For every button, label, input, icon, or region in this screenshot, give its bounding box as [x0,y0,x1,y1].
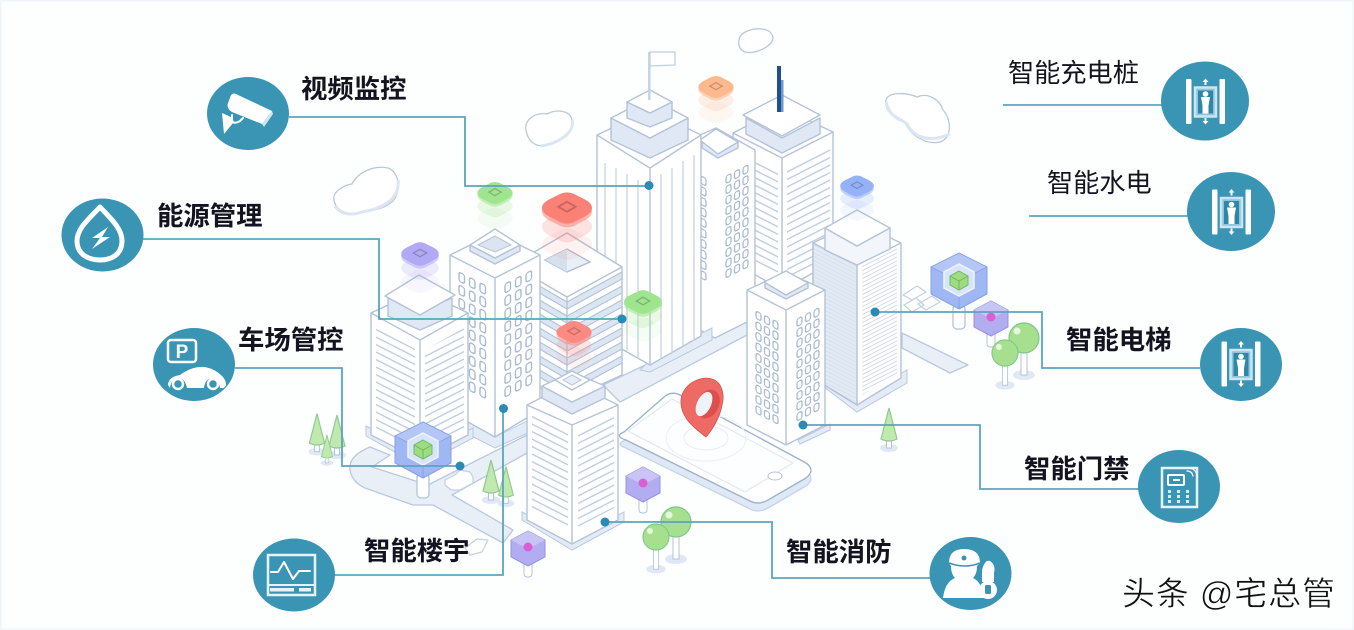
connector: 智能楼宇 [335,404,508,575]
building: central tower with flag [597,52,712,372]
cloud: top [739,29,773,53]
building: left hatched [366,275,473,466]
label: 视频监控: 视频监控 [301,74,407,104]
floating chip: blue [840,176,874,221]
sensor node: center [626,467,660,513]
smartphone with location pin [619,378,811,511]
watermark: 头条 @宅总管 [1122,575,1335,612]
icon: parking and car [153,328,235,401]
connector: 智能水电 [1029,215,1188,217]
small cars and parked vehicles [445,286,940,555]
icon: access keypad [1138,450,1220,523]
floating chip: purple [401,242,439,293]
building: left windowed [448,229,545,448]
icon: elevator [1200,328,1282,401]
label: 智能楼宇: 智能楼宇 [364,536,470,566]
floating chip: green upper [477,182,513,230]
floating chip: orange [698,76,734,124]
cloud: left [334,167,398,214]
connector: 智能充电桩 [1003,104,1162,106]
building: rear center windowed [700,128,755,338]
connector: 智能门禁 [798,420,1139,489]
label: 智能充电桩: 智能充电桩 [1008,58,1139,88]
icon: elevator (water power) [1187,172,1275,251]
cloud: right [886,94,950,143]
sensor cube: left [395,422,451,498]
floating chip: green lower [624,290,662,341]
cloud: upper center [526,111,572,146]
building: stacked floors [512,233,622,400]
connector: 能源管理 [143,239,626,324]
building: front center hatched [522,371,624,550]
road network [350,317,968,543]
icon: firefighter [930,537,1012,610]
icon: water drop energy [62,198,144,272]
floating chip: red lower [556,321,592,369]
icon: security camera [207,77,289,150]
floating chip: red large [542,192,592,260]
icon: monitor [253,538,335,612]
building: front right windowed [747,271,830,445]
icon: parking and car: P [176,342,189,363]
icon: elevator (charging) [1161,62,1249,140]
label: 能源管理: 能源管理 [157,201,263,231]
label: 智能水电: 智能水电 [1047,168,1152,198]
sensor node: bottom [511,531,545,577]
sensor node: right [974,301,1008,347]
connector: 视频监控 [289,117,654,190]
label: 智能门禁: 智能门禁 [1024,454,1130,484]
connector: 智能电梯 [870,308,1200,368]
connector: 车场管控 [235,368,464,470]
label: 智能消防: 智能消防 [786,537,892,567]
sensor cube: right [931,253,987,329]
label: 车场管控: 车场管控 [238,325,344,355]
connector: 智能消防 [600,518,930,578]
trees [308,323,1039,574]
building: rear right with antenna [733,66,833,290]
building: right tall hatched [808,210,907,412]
label: 智能电梯: 智能电梯 [1066,325,1172,355]
